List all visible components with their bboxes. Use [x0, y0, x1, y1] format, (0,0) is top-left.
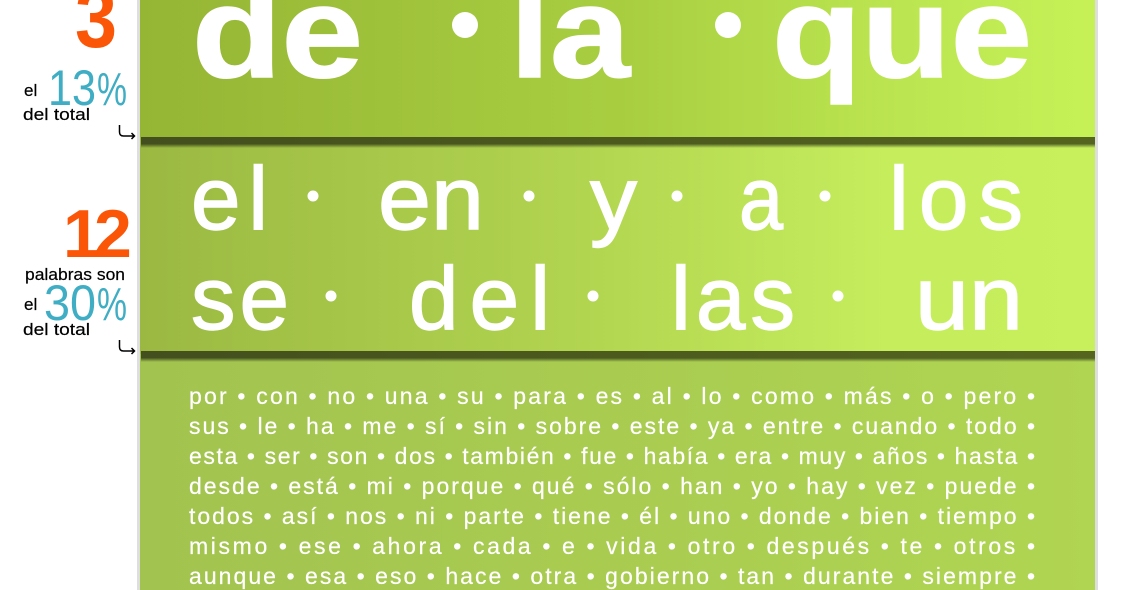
word list: aunque • esa • eso • hace • otra • gobierno • tan • durante • siempre • [189, 563, 1035, 589]
percentage 13: 13 [48, 60, 96, 116]
words first row: el [191, 148, 268, 248]
label del total: del total [23, 320, 90, 339]
words second row [191, 248, 1023, 348]
words first row [191, 148, 1023, 248]
word list: todos • así • nos • ni • parte • tiene • él • uno • donde • bien • tiempo • [189, 503, 1035, 529]
word list: por • con • no • una • su • para • es • al • lo • como • más • o • pero • [189, 383, 1035, 409]
percent sign: % [97, 63, 127, 115]
percentage 30: 30 [44, 275, 96, 331]
panel: top three words [140, 0, 1095, 148]
band shadow 2 [141, 351, 1095, 362]
panel: twelve words [140, 140, 1095, 362]
arrow 2 [120, 340, 134, 354]
words second row: se [191, 248, 289, 348]
label palabras son: palabras son [25, 265, 125, 284]
words first row: a [739, 148, 783, 248]
stat: 3 words [23, 0, 127, 124]
label el: el [24, 295, 37, 314]
panel: remaining words [140, 354, 1095, 590]
stat: 12 words [23, 196, 132, 339]
words first row: los [889, 148, 1023, 248]
dot separator [715, 12, 741, 38]
number 12: 12 [63, 196, 132, 272]
words first row: y [590, 148, 638, 248]
word list [189, 383, 1035, 589]
word list: desde • está • mi • porque • qué • sólo • han • yo • hay • vez • puede • [189, 473, 1035, 499]
word list: esta • ser • son • dos • también • fue • había • era • muy • años • hasta • [189, 443, 1035, 469]
words second row: las [671, 248, 795, 348]
dot separator [452, 12, 478, 38]
words second row: del [409, 248, 550, 348]
percent sign: % [97, 278, 127, 330]
band shadow 1 [141, 137, 1095, 148]
words first row: en [378, 148, 484, 248]
word list: sus • le • ha • me • sí • sin • sobre • este • ya • entre • cuando • todo • [189, 413, 1035, 439]
label el: el [24, 81, 37, 100]
label del total: del total [23, 105, 90, 124]
word list: mismo • ese • ahora • cada • e • vida • otro • después • te • otros • [189, 533, 1035, 559]
arrow 1 [120, 125, 134, 139]
words second row: un [915, 248, 1023, 348]
